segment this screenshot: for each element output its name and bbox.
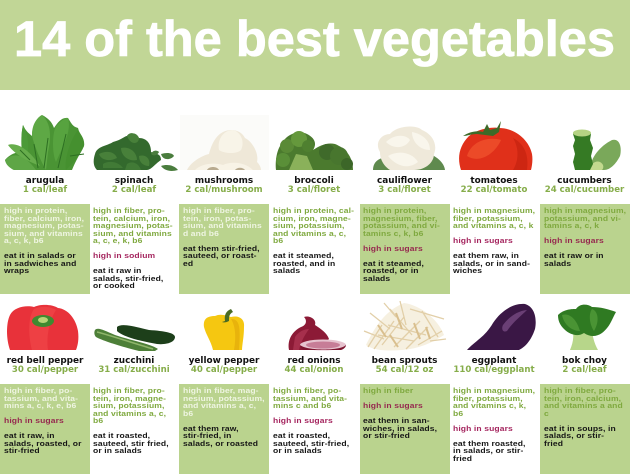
facts: zucchini: eat it roasted, <box>93 431 150 440</box>
facts: arugula: in sadwiches and <box>4 258 76 268</box>
label: arugula: arugula <box>26 176 64 186</box>
facts: bok choy: eat it in soups, in <box>544 424 615 432</box>
facts: yellow pepper: b6 <box>183 408 193 418</box>
facts: red bell pepper <box>0 384 90 474</box>
calories: red bell pepper: 30 cal/pepper <box>12 365 78 375</box>
facts: tomatoes: high in magnesium, <box>453 206 535 215</box>
facts: broccoli: b6 <box>272 236 283 245</box>
facts: tomatoes <box>453 206 535 275</box>
panel: eggplant <box>453 304 536 462</box>
facts: red onions: high in sugars <box>272 416 332 425</box>
facts: arugula: sium, and vitamins <box>4 228 82 238</box>
panel: spinach <box>93 133 178 290</box>
panel: red onions <box>272 316 349 455</box>
facts: red onions: tassium, and vita- <box>272 394 347 402</box>
facts: yellow pepper: high in fiber, mag- <box>183 386 259 395</box>
calories: yellow pepper: 40 cal/pepper <box>191 365 257 375</box>
facts: yellow pepper: salads, or roasted <box>183 438 258 448</box>
facts: mushrooms: eat them stir-fried, <box>183 244 260 252</box>
label: bean sprouts: bean sprouts <box>372 356 437 366</box>
label: broccoli: broccoli <box>294 176 334 186</box>
facts: red bell pepper: high in fiber, po- <box>4 386 72 395</box>
facts: bok choy <box>540 384 630 474</box>
label: spinach: spinach <box>115 176 153 186</box>
icon: red bell pepper <box>7 304 78 350</box>
panel: mushrooms <box>179 130 269 294</box>
facts: bok choy: c <box>544 408 548 418</box>
facts: mushrooms: high in fiber, pro- <box>183 206 255 215</box>
facts: cauliflower: potassium, and vi- <box>363 221 440 230</box>
facts: eggplant: in salads, or stir- <box>453 446 523 455</box>
panel: zucchini <box>93 325 175 455</box>
icon: bean sprouts <box>364 300 446 350</box>
facts: bean sprouts <box>360 384 450 474</box>
facts: eggplant: eat them roasted, <box>453 438 526 448</box>
facts: cauliflower: tamins c, k, b6 <box>363 228 423 238</box>
facts: broccoli: eat it steamed, <box>272 251 333 260</box>
facts: red bell pepper: high in sugars <box>4 416 63 425</box>
facts: arugula: eat it in salads or <box>4 251 75 260</box>
title banner <box>0 0 630 90</box>
facts: broccoli: cium, iron, magne- <box>272 214 350 222</box>
icon: yellow pepper <box>204 309 244 350</box>
icon: tomatoes <box>459 121 532 170</box>
facts: eggplant: fried <box>453 454 472 462</box>
label: eggplant: eggplant <box>472 356 516 366</box>
facts: cauliflower: salads <box>363 274 390 282</box>
facts: bok choy: high in fiber, pro- <box>544 386 615 395</box>
facts: cucumbers: tamins a, c, k <box>544 221 599 230</box>
facts: broccoli <box>272 206 354 275</box>
facts: zucchini: and vitamins a, c, <box>93 408 166 418</box>
facts: eggplant: high in magnesium, <box>453 386 535 395</box>
facts: red bell pepper: eat it raw, in <box>4 431 54 440</box>
facts: arugula: high in protein, <box>4 206 67 215</box>
facts: cauliflower: eat it steamed, <box>363 258 424 268</box>
facts: red bell pepper: mins a, c, k, e, b6 <box>4 401 76 410</box>
facts: cucumbers: salads <box>544 258 571 268</box>
calories: cauliflower: 3 cal/floret <box>378 185 431 195</box>
facts: yellow pepper: nesium, potassium, <box>183 394 265 402</box>
facts: zucchini: tein, iron, magne- <box>93 394 166 402</box>
icon: arugula <box>5 115 84 170</box>
icon: bok choy <box>558 304 616 350</box>
title: 14 of the best vegetables <box>14 11 615 67</box>
calories: broccoli: 3 cal/floret <box>288 185 340 195</box>
facts: bean sprouts: eat them in san- <box>363 416 430 425</box>
facts: cauliflower: high in sugars <box>363 244 423 252</box>
facts: bean sprouts: or stir-fried <box>363 431 410 440</box>
facts: red bell pepper: stir-fried <box>4 446 39 455</box>
facts: arugula <box>0 204 90 294</box>
facts: spinach: sium, and vitamins <box>93 228 172 238</box>
facts: broccoli: and vitamins a, c, <box>272 228 346 238</box>
facts: cauliflower: magnesium, fiber, <box>363 214 437 222</box>
facts: mushrooms <box>179 204 269 294</box>
facts: bok choy: tein, iron, calcium, <box>544 394 621 402</box>
calories: spinach: 2 cal/leaf <box>112 185 156 195</box>
facts: tomatoes: high in sugars <box>453 236 513 245</box>
calories: tomatoes: 22 cal/tomato <box>461 185 527 195</box>
facts: bean sprouts: high in sugars <box>363 401 423 410</box>
facts: spinach: or cooked <box>93 281 135 290</box>
label: red onions: red onions <box>288 356 340 366</box>
icon: zucchini <box>94 325 175 351</box>
facts: mushrooms: ed <box>183 258 193 268</box>
facts: red onions <box>272 386 349 455</box>
facts: broccoli: roasted, and in <box>272 258 335 268</box>
facts: cucumbers: high in sugars <box>544 236 603 245</box>
facts: zucchini: sium, potassium, <box>93 401 164 410</box>
facts: eggplant: b6 <box>453 408 463 418</box>
facts: arugula: wraps <box>4 266 29 275</box>
label: mushrooms: mushrooms <box>195 176 253 186</box>
facts: cucumbers: potassium, and vi- <box>544 214 620 222</box>
facts: tomatoes: fiber, potassium, <box>453 214 523 222</box>
facts: arugula: fiber, calcium, iron, <box>4 214 84 222</box>
facts: red onions: eat it roasted, <box>272 431 330 440</box>
facts: spinach <box>93 206 173 290</box>
facts: arugula: magnesium, potas- <box>4 221 83 230</box>
facts: eggplant: and vitamins c, k, <box>453 401 526 410</box>
calories: bean sprouts: 54 cal/12 oz <box>376 365 433 375</box>
panel: yellow pepper <box>179 309 269 474</box>
panel: broccoli <box>272 131 354 275</box>
facts: broccoli: sium, potassium, <box>272 221 344 230</box>
panel: red bell pepper <box>0 304 90 474</box>
facts: spinach: salads, stir-fried, <box>93 274 163 282</box>
facts: bok choy: fried <box>544 438 563 448</box>
label: yellow pepper: yellow pepper <box>189 356 259 366</box>
panel: tomatoes <box>453 121 535 275</box>
facts: tomatoes: wiches <box>453 266 482 275</box>
label: zucchini: zucchini <box>114 356 154 366</box>
facts: mushrooms: d and b6 <box>183 228 219 238</box>
facts: arugula: a, c, k, b6 <box>4 236 43 245</box>
calories: cucumbers: 24 cal/cucumber <box>545 185 624 195</box>
icon: mushrooms <box>187 130 261 170</box>
facts: zucchini: b6 <box>93 416 103 425</box>
label: cucumbers: cucumbers <box>557 176 612 186</box>
facts: yellow pepper <box>179 384 269 474</box>
facts: red onions: sauteed, stir-fried, <box>272 438 349 448</box>
calories: eggplant: 110 cal/eggplant <box>453 365 535 375</box>
facts: zucchini <box>93 386 169 455</box>
facts: cauliflower: high in protein, <box>363 206 426 215</box>
facts: eggplant: high in sugars <box>453 424 513 432</box>
facts: cucumbers: high in magnesium, <box>544 206 626 215</box>
icon: spinach <box>94 133 178 171</box>
panel: arugula <box>0 115 90 294</box>
facts: cauliflower: roasted, or in <box>363 266 419 275</box>
icon: eggplant <box>467 304 536 350</box>
facts: bok choy: salads, or stir- <box>544 431 604 440</box>
facts: yellow pepper: eat them raw, <box>183 424 239 432</box>
calories: bok choy: 2 cal/leaf <box>562 365 607 375</box>
facts: red bell pepper: tassium, and vita- <box>4 394 78 402</box>
facts: spinach: high in fiber, pro- <box>93 206 165 215</box>
panel: cauliflower <box>360 126 450 294</box>
facts: cucumbers <box>540 204 630 294</box>
facts: spinach: a, c, e, k, b6 <box>93 236 142 245</box>
label: cauliflower: cauliflower <box>377 176 432 186</box>
facts: spinach: tein, calcium, iron, <box>93 214 170 222</box>
facts: bean sprouts: high in fiber <box>363 386 413 395</box>
icon: cucumbers <box>573 130 621 170</box>
facts: mushrooms: sauteed, or roast- <box>183 251 257 260</box>
facts: cauliflower <box>360 204 450 294</box>
facts: spinach: eat it raw in <box>93 266 141 275</box>
facts: zucchini: sauteed, stir fried, <box>93 438 169 448</box>
facts: mushrooms: tein, iron, potas- <box>183 214 251 222</box>
facts: tomatoes: and vitamins a, c, k <box>453 221 533 230</box>
icon: broccoli <box>276 131 353 170</box>
icon: red onions <box>288 316 346 350</box>
calories: mushrooms: 2 cal/mushroom <box>185 185 263 195</box>
facts: broccoli: salads <box>272 266 300 275</box>
label: red bell pepper: red bell pepper <box>7 356 83 366</box>
facts: red onions: high in fiber, po- <box>272 386 341 395</box>
facts: red bell pepper: salads, roasted, or <box>4 438 81 448</box>
panel: cucumbers <box>540 130 630 294</box>
calories: zucchini: 31 cal/zucchini <box>98 365 170 375</box>
facts: bean sprouts: wiches, in salads, <box>363 424 437 432</box>
facts: tomatoes: salads, or in sand- <box>453 258 530 268</box>
facts: zucchini: high in fiber, pro- <box>93 386 165 395</box>
facts: bok choy: and vitamins a and <box>544 401 622 410</box>
panel: bok choy <box>540 304 630 474</box>
facts: tomatoes: eat them raw, in <box>453 251 519 260</box>
label: tomatoes: tomatoes <box>470 176 518 186</box>
panel: bean sprouts <box>360 300 450 474</box>
facts: mushrooms: sium, and vitamins <box>183 221 262 230</box>
facts: yellow pepper: stir-fried, in <box>183 431 231 440</box>
facts: eggplant: fiber, potassium, <box>453 394 523 402</box>
facts: cucumbers: eat it raw or in <box>544 251 603 260</box>
facts: broccoli: high in protein, cal- <box>272 206 354 215</box>
facts: red onions: mins c and b6 <box>272 401 331 410</box>
facts: red onions: or in salads <box>272 446 321 455</box>
facts: spinach: magnesium, potas- <box>93 221 173 230</box>
facts: spinach: high in sodium <box>93 251 155 260</box>
facts: zucchini: or in salads <box>93 446 142 455</box>
icon: cauliflower <box>373 126 445 170</box>
calories: arugula: 1 cal/leaf <box>23 185 67 195</box>
label: bok choy: bok choy <box>562 356 607 366</box>
calories: red onions: 44 cal/onion <box>285 365 343 375</box>
facts: eggplant <box>453 386 535 462</box>
facts: yellow pepper: and vitamins a, c, <box>183 401 256 410</box>
